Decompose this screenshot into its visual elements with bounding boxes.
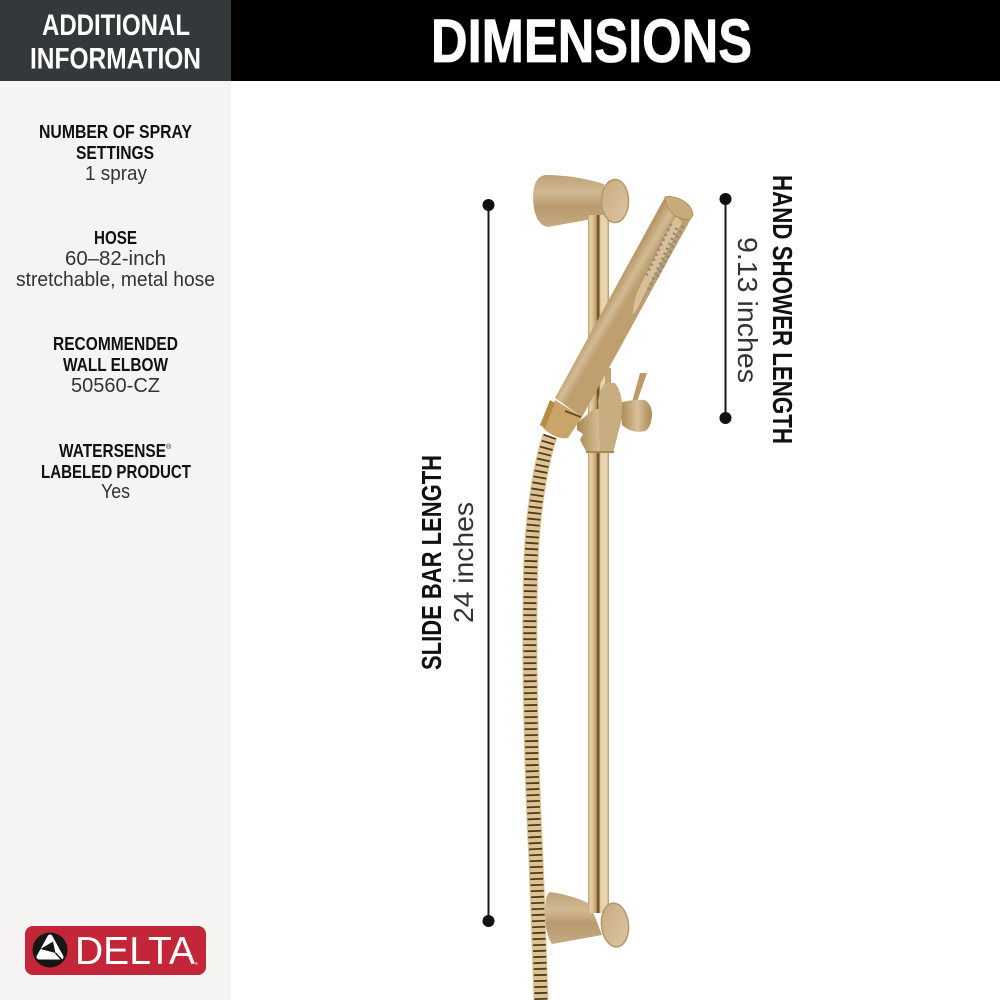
collar [543,400,582,438]
info: recommended wall elbow [53,334,178,397]
label: hand shower length: HAND SHOWER LENGTH [767,175,798,444]
logo: Delta: DELTA [75,930,195,973]
label: hand shower length [732,175,798,444]
info: recommended wall elbow: RECOMMENDED [53,334,178,354]
left arm and base [577,405,620,453]
hose [530,436,550,1000]
lever [632,373,647,402]
info: watersense labeled product [41,441,191,503]
dimension: slide bar length line [482,199,494,927]
column [598,383,622,453]
info: watersense labeled product: WATERSENSE [59,441,166,461]
header: additional information [0,0,231,81]
top bracket cap [602,180,628,222]
info: number of spray settings: 1 spray [85,163,147,185]
info: watersense labeled product: ® [166,443,172,451]
logo: Delta: ® [195,961,198,966]
panel: additional information sidebar [0,81,231,1000]
info: number of spray settings: SETTINGS [76,143,154,163]
slide bar [588,215,609,913]
bottom bracket body [545,892,602,944]
info: hose: 60–82-inch [65,248,166,270]
info: number of spray settings: NUMBER OF SPRAY [39,122,192,142]
bottom bracket cap [599,902,631,948]
info: watersense labeled product: LABELED PRODUCT [41,462,191,482]
hand shower [540,196,693,438]
label: slide bar length: SLIDE BAR LENGTH [416,455,447,670]
header: dimensions title [231,0,1000,81]
header: dimensions title: DIMENSIONS [431,7,752,75]
info: hose: stretchable, metal hose [16,269,215,291]
label: slide bar length [416,455,479,670]
right knob [620,400,652,432]
holder mount [577,368,652,453]
info: hose [16,228,215,291]
spray nozzles [646,224,683,290]
dimension: hand shower length line [720,193,732,424]
info: watersense labeled product: Yes [101,481,130,503]
spray face [632,217,683,315]
header: additional information: INFORMATION [30,42,201,76]
info: recommended wall elbow: 50560-CZ [71,375,160,397]
label: hand shower length: 9.13 inches [732,237,763,383]
logo: Delta [25,926,206,975]
info: number of spray settings [39,122,192,185]
product: slide bar and hand shower [530,175,693,1000]
top bracket body [533,175,604,227]
header: additional information: ADDITIONAL [42,9,190,42]
info: hose: HOSE [94,228,137,248]
label: slide bar length: 24 inches [448,502,479,623]
info: recommended wall elbow: WALL ELBOW [63,355,168,375]
